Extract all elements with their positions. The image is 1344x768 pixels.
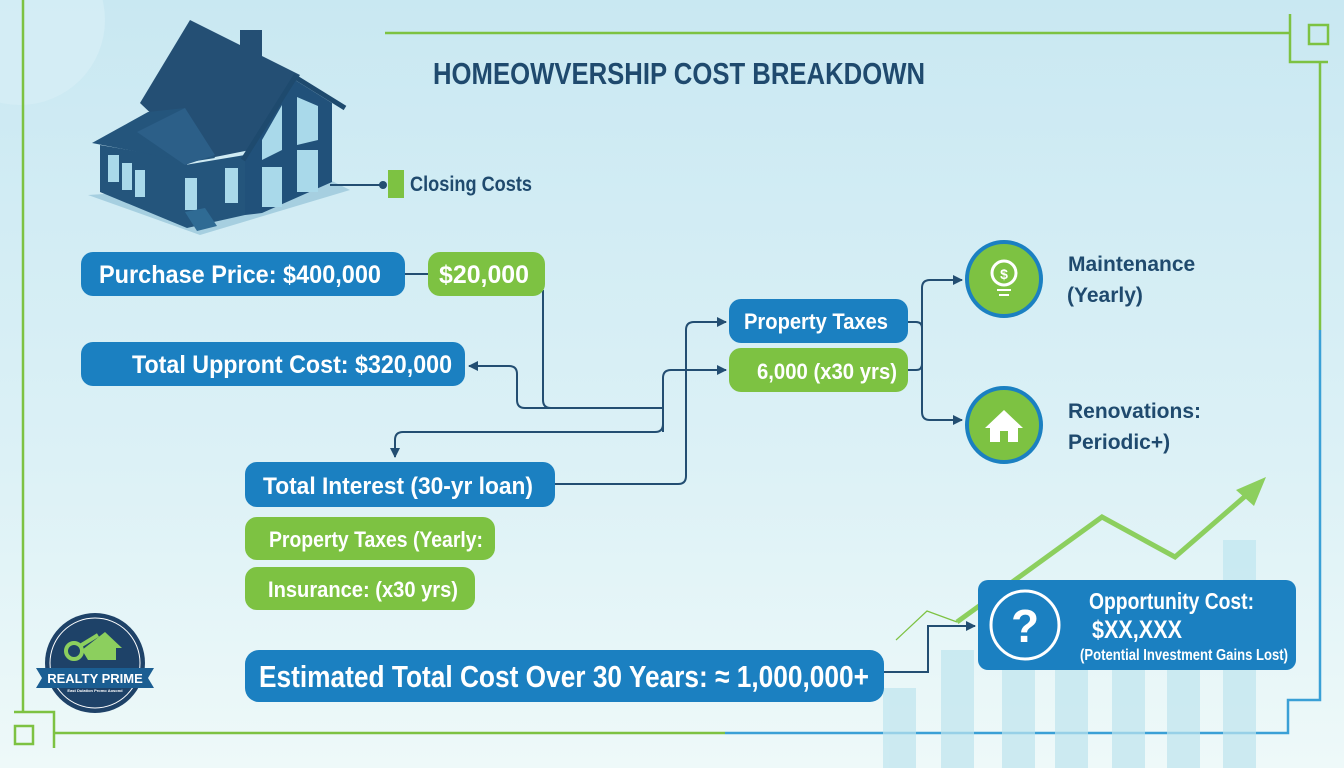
icon: renovations circle (967, 388, 1041, 462)
box: closing cost amount: $20,000 (439, 261, 529, 289)
closing costs label (330, 170, 532, 198)
opportunity cost box: (Potential Investment Gains Lost) (1080, 647, 1288, 664)
logo: realty prime: East Dulation Promo Aosond (67, 688, 123, 693)
opportunity cost box: Opportunity Cost: (1089, 588, 1254, 614)
trend arrow (896, 477, 1266, 640)
box: estimated total: Estimated Total Cost Over 30 Years: ≈ 1,000,000+ (259, 659, 869, 694)
box: purchase price (81, 252, 405, 296)
box: property taxes (729, 299, 908, 343)
box: total upfront cost (81, 342, 465, 386)
renovations label: Renovations: (1068, 400, 1201, 423)
opportunity cost box: $XX,XXX (1092, 616, 1182, 644)
connectors (395, 274, 975, 672)
box: 6000 (729, 348, 908, 392)
box: total upfront cost: Total Uppront Cost: $320,000 (132, 351, 452, 379)
maintenance label (1067, 253, 1195, 307)
box: closing cost amount (428, 252, 545, 296)
background bar chart (883, 540, 1256, 768)
closing costs label: Closing Costs (410, 173, 532, 196)
box: 6000: 6,000 (x30 yrs) (757, 359, 897, 384)
opportunity cost box: ? (1011, 600, 1039, 652)
box: insurance: Insurance: (x30 yrs) (268, 577, 458, 602)
box: total interest (245, 462, 555, 507)
maintenance label: (Yearly) (1067, 284, 1143, 307)
box: purchase price: Purchase Price: $400,000 (99, 261, 381, 289)
box: total interest: Total Interest (30-yr loan) (263, 473, 533, 500)
box: property taxes yearly (245, 517, 495, 560)
renovations label: Periodic+) (1068, 431, 1170, 454)
title: HOMEOWVERSHIP COST BREAKDOWN (433, 56, 925, 91)
box: estimated total (245, 650, 884, 702)
icon: maintenance circle (967, 242, 1041, 316)
logo: realty prime: REALTY PRIME (47, 671, 143, 686)
icon: house illustration (88, 20, 350, 235)
box: insurance (245, 567, 475, 610)
box: property taxes: Property Taxes (744, 309, 888, 334)
box: property taxes yearly: Property Taxes (Yearly: (269, 527, 483, 552)
maintenance label: Maintenance (1068, 253, 1195, 276)
renovations label (1068, 400, 1201, 454)
logo: realty prime (36, 613, 154, 713)
icon: maintenance circle: $ (1000, 266, 1008, 282)
opportunity cost box (978, 580, 1296, 670)
